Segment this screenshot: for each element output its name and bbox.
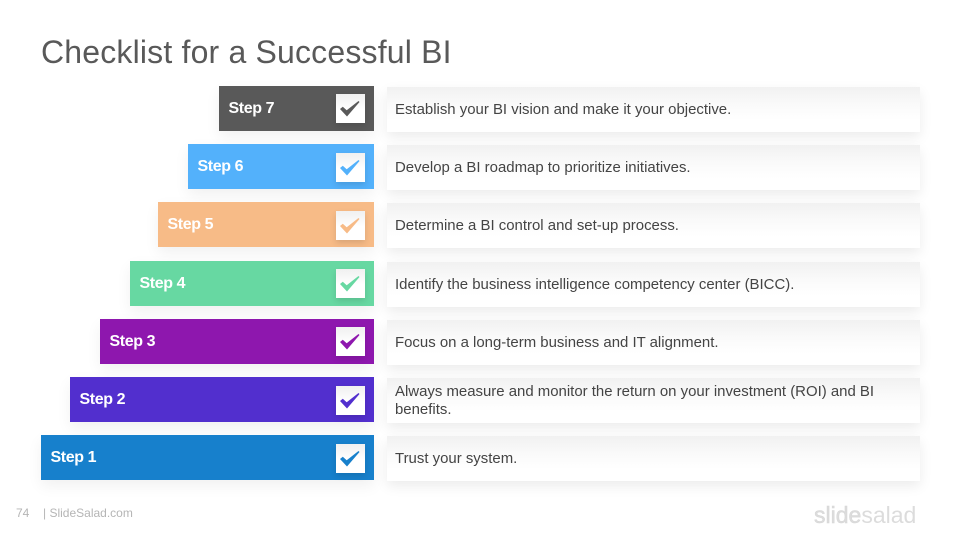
step 5 bar [158, 202, 374, 247]
step 4 text panel [387, 262, 920, 307]
step 5 bar: Step 5 [168, 216, 213, 232]
step 1 bar [41, 435, 374, 480]
icon: step 2 checkbox [336, 386, 365, 415]
step 7 bar: Step 7 [228, 100, 274, 116]
step 5 text panel: Determine a BI control and set-up process. [395, 216, 679, 234]
icon: step 4 checkbox [336, 269, 365, 298]
step 3 text panel: Focus on a long-term business and IT alignment. [395, 334, 719, 350]
icon: step 3 checkbox [336, 327, 365, 356]
footer source: | SlideSalad.com [43, 506, 133, 520]
step 1 text panel [387, 436, 920, 481]
step 6 text panel [387, 145, 920, 190]
step 2 bar [70, 377, 374, 422]
step 1 text panel: Trust your system. [395, 450, 517, 466]
step 4 bar [130, 261, 374, 306]
step 7 text panel [387, 87, 920, 132]
step 4 bar: Step 4 [140, 274, 185, 292]
step 6 bar [188, 144, 374, 189]
logo wordmark: slidesalad [814, 502, 916, 528]
icon: step 6 checkbox [336, 153, 365, 182]
step 7 text panel: Establish your BI vision and make it your objective. [395, 100, 731, 118]
icon: step 7 checkbox [336, 94, 365, 123]
page number: 74 [16, 506, 29, 520]
step 3 bar: Step 3 [110, 332, 155, 350]
step 4 text panel: Identify the business intelligence competency center (BICC). [395, 276, 794, 292]
step 2 bar: Step 2 [80, 390, 125, 408]
step 3 bar [100, 319, 374, 364]
step 7 bar [219, 86, 374, 131]
step 1 bar: Step 1 [50, 448, 96, 466]
step 2 text panel [387, 378, 920, 423]
step 2 text panel: Always measure and monitor the return on your investment (ROI) and BI benefits. [395, 382, 874, 418]
step 6 text panel: Develop a BI roadmap to prioritize initiatives. [395, 158, 691, 176]
step 3 text panel [387, 320, 920, 365]
icon: step 1 checkbox [336, 444, 365, 473]
step 5 text panel [387, 203, 920, 248]
title: Checklist for a Successful BI [41, 34, 452, 70]
step 6 bar: Step 6 [198, 158, 243, 174]
icon: step 5 checkbox [336, 211, 365, 240]
